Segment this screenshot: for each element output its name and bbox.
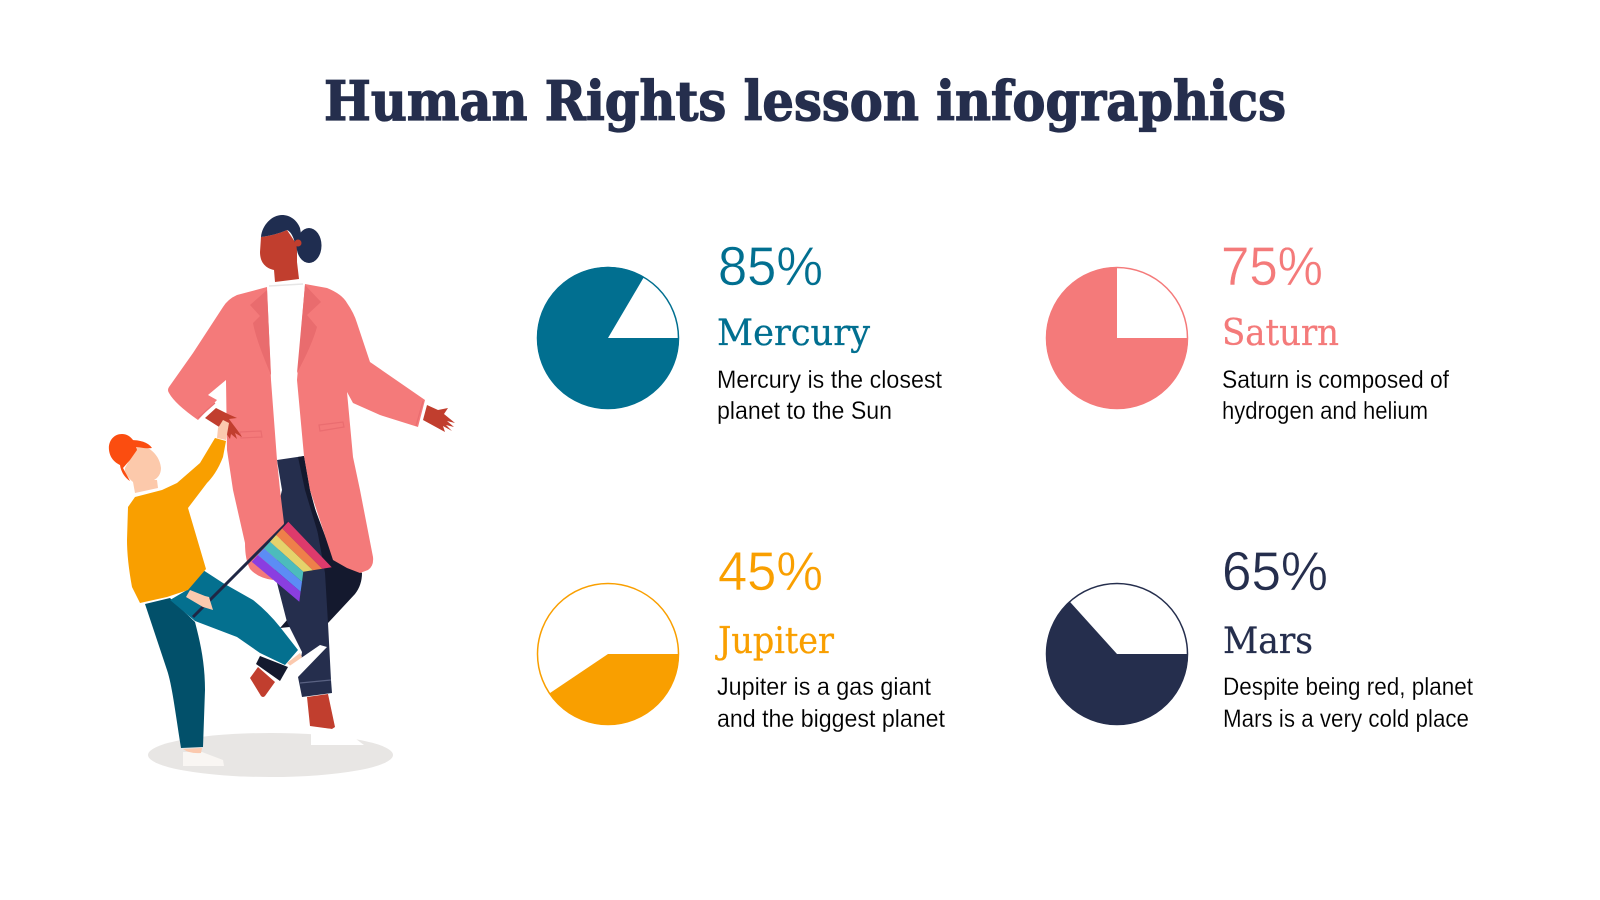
pie chart: 45% — [538, 584, 679, 725]
description: Jupiter is a gas giant — [717, 673, 931, 701]
panel: Saturn — [1046, 235, 1449, 425]
percentage: 65% — [1222, 540, 1328, 602]
percentage: 75% — [1221, 235, 1323, 297]
description — [717, 366, 942, 425]
pie chart: 65% — [1046, 584, 1188, 725]
ground shadow — [148, 733, 393, 777]
description — [1222, 366, 1449, 425]
name: Jupiter — [714, 621, 835, 662]
description: Mars is a very cold place — [1223, 705, 1469, 733]
name: Mars — [1223, 621, 1313, 662]
description: planet to the Sun — [717, 397, 892, 425]
illustration: woman and child with rainbow flag — [109, 215, 455, 777]
description: Despite being red, planet — [1223, 673, 1473, 701]
description: Saturn is composed of — [1222, 366, 1449, 394]
description: hydrogen and helium — [1222, 397, 1428, 425]
name: Saturn — [1222, 313, 1339, 354]
panel: Mars — [1046, 540, 1473, 733]
pie chart: 85% — [537, 267, 679, 409]
child figure — [109, 420, 327, 766]
rainbow flag — [193, 522, 332, 617]
panel: Mercury — [537, 235, 942, 425]
percentage: 85% — [718, 235, 823, 297]
title: Human Rights lesson infographics — [324, 69, 1286, 133]
percentage: 45% — [718, 540, 823, 602]
description — [717, 673, 945, 733]
panel: Jupiter — [538, 540, 945, 733]
child hand on thigh — [186, 590, 213, 610]
woman figure — [168, 215, 455, 745]
description: Mercury is the closest — [717, 366, 942, 394]
description — [1223, 673, 1473, 733]
description: and the biggest planet — [717, 705, 945, 733]
pie chart: 75% — [1046, 267, 1188, 409]
name: Mercury — [717, 313, 871, 354]
